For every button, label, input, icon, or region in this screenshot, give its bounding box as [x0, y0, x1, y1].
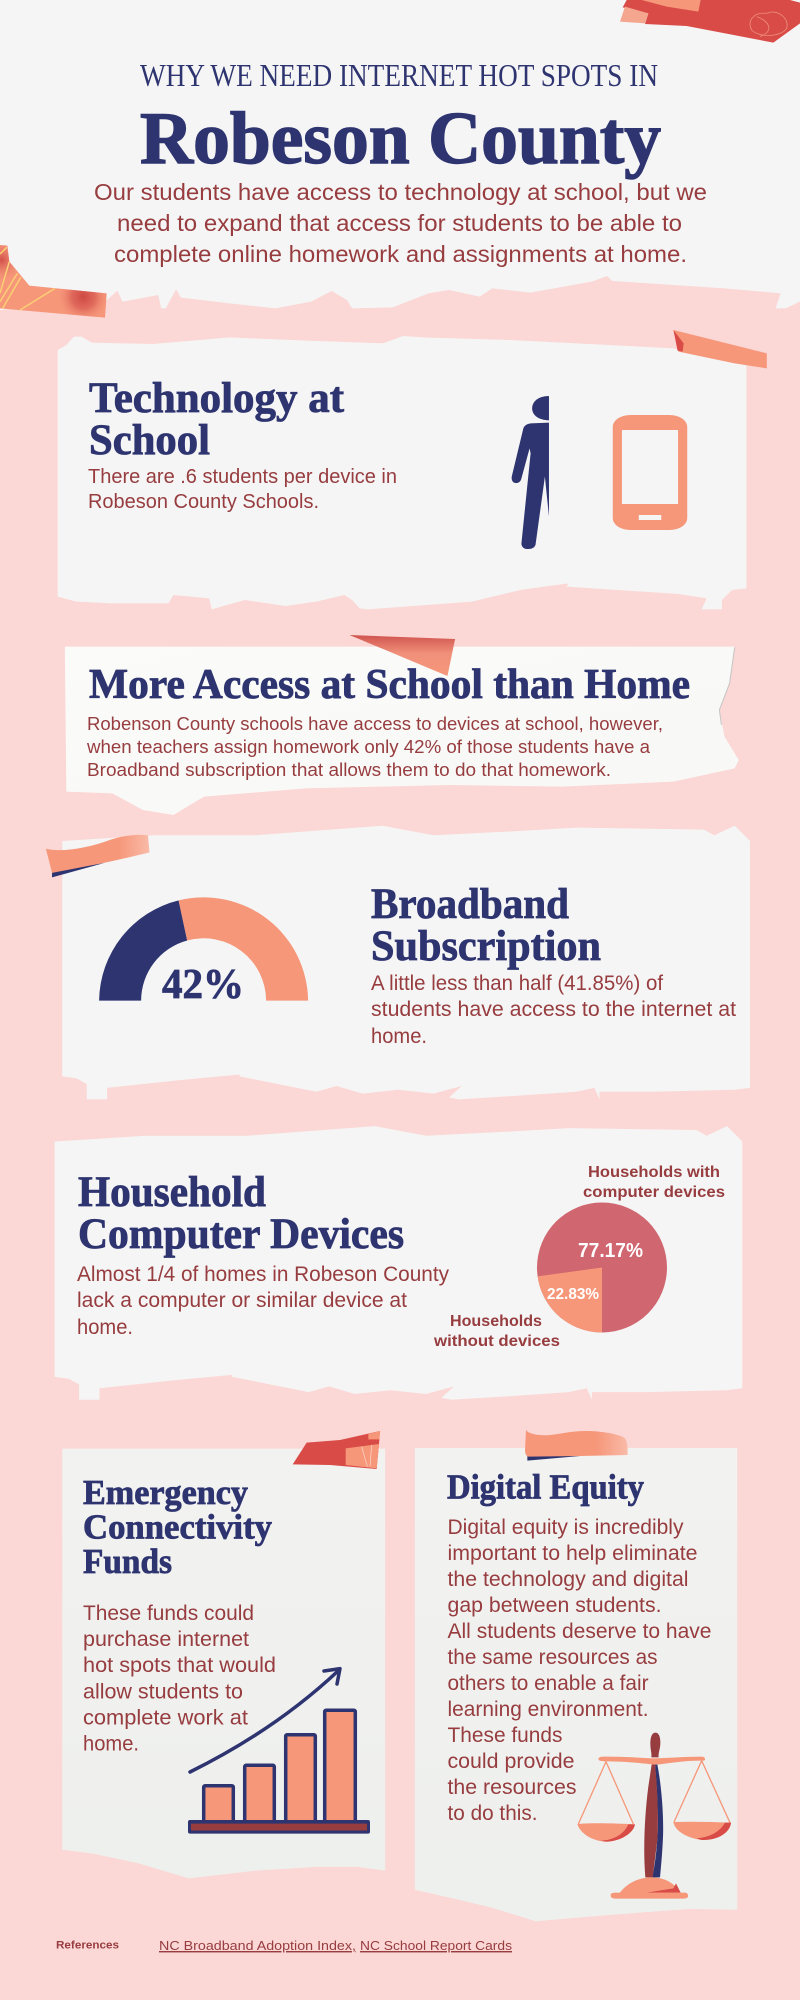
heading: Subscription [371, 923, 601, 970]
heading: Connectivity [83, 1508, 272, 1546]
body text: purchase internet [83, 1628, 249, 1651]
pie: without devices [538, 1268, 602, 1332]
intro text: complete online homework and assignments at home. [114, 241, 687, 267]
body text: complete work at [83, 1706, 248, 1730]
intro text: need to expand that access for students to be able to [117, 210, 682, 236]
label: households with devices: computer devices [583, 1184, 725, 1201]
pie chart [537, 1202, 667, 1332]
body text: Almost 1/4 of homes in Robeson County [77, 1263, 449, 1286]
body text: A little less than half (41.85%) of [371, 972, 663, 995]
reference links: NC School Report Cards [360, 1938, 513, 1953]
body text: home. [371, 1025, 427, 1048]
body text [83, 1602, 276, 1756]
label: households with devices: Households with [588, 1164, 720, 1181]
icon: balance scale [577, 1733, 731, 1899]
body text: All students deserve to have [448, 1620, 712, 1643]
panel: household computer devices [55, 1126, 742, 1400]
panel: digital equity [415, 1430, 737, 1921]
tape: red [293, 1431, 380, 1469]
heading: Funds [83, 1542, 172, 1581]
intro text: Our students have access to technology at school, but we [94, 179, 707, 205]
body text: home. [77, 1316, 133, 1339]
references label: References [56, 1940, 119, 1952]
heading: Technology at [89, 375, 345, 422]
heading [83, 1473, 272, 1581]
tape: top right [620, 0, 800, 43]
panel: broadband subscription [46, 826, 750, 1099]
tape: card corner [673, 330, 767, 368]
label: households with devices [583, 1164, 725, 1201]
body text: home. [83, 1732, 139, 1756]
reference links: NC Broadband Adoption Index, [159, 1938, 356, 1953]
body text: There are .6 students per device in [88, 465, 397, 488]
card paper [62, 826, 750, 1099]
body text [448, 1516, 712, 1825]
icon: half student [512, 396, 549, 549]
body text: the same resources as [448, 1646, 658, 1669]
gauge value: 42% [162, 962, 244, 1008]
label: households without devices: without devices [433, 1333, 560, 1350]
card paper [415, 1448, 737, 1921]
heading: School [89, 417, 210, 464]
card paper [55, 1126, 742, 1400]
body text: when teachers assign homework only 42% of those students have a [86, 736, 651, 757]
heading [89, 375, 345, 464]
tape: wavy [46, 835, 149, 877]
card paper [58, 336, 746, 609]
body text: Digital equity is incredibly [448, 1516, 684, 1539]
body text [77, 1263, 449, 1339]
body text: others to enable a fair [448, 1672, 648, 1695]
title: Robeson County [140, 98, 661, 180]
heading: Emergency [83, 1473, 248, 1512]
pie value: 22.83%: 22.83% [547, 1286, 599, 1303]
panel: more access at school than home [65, 635, 739, 815]
body text [88, 465, 397, 513]
body text: could provide [448, 1750, 574, 1773]
body text [86, 713, 663, 780]
body text: to do this. [448, 1802, 538, 1825]
body text: the technology and digital [448, 1568, 688, 1591]
heading: Digital Equity [447, 1468, 644, 1507]
heading: More Access at School than Home [89, 662, 690, 708]
pie: with devices [537, 1202, 667, 1332]
body text: hot spots that would [83, 1654, 276, 1677]
body text: allow students to [83, 1680, 243, 1704]
body text [371, 972, 736, 1048]
tape: wavy [525, 1430, 628, 1461]
body text: Broadband subscription that allows them to do that homework. [87, 759, 611, 780]
gauge: navy 42% segment [99, 900, 187, 1001]
heading [371, 881, 601, 970]
icon: phone [613, 415, 687, 530]
tape: triangle [349, 635, 455, 676]
panel: emergency connectivity funds [62, 1431, 385, 1878]
card paper [62, 1449, 385, 1878]
tape: left [0, 245, 107, 318]
body text: gap between students. [448, 1594, 662, 1617]
panel: technology at school [58, 330, 767, 609]
heading: Household [78, 1169, 266, 1216]
body text: Robeson County Schools. [88, 490, 319, 513]
panel: header [0, 0, 800, 318]
pie value: 77.17%: 77.17% [578, 1240, 643, 1262]
body text: These funds [448, 1724, 562, 1747]
label: households without devices: Households [450, 1313, 542, 1330]
heading: Broadband [371, 881, 569, 928]
body text: important to help eliminate [448, 1542, 698, 1565]
icon: rising bar chart [188, 1669, 370, 1834]
body text: Robenson County schools have access to devices at school, however, [87, 713, 663, 734]
subtitle: WHY WE NEED INTERNET HOT SPOTS IN [140, 57, 658, 93]
intro text [94, 179, 707, 267]
header torn paper [0, 0, 800, 310]
body text: the resources [448, 1776, 576, 1799]
gauge chart [99, 897, 308, 1008]
body text: learning environment. [448, 1698, 648, 1721]
gauge: orange remainder [179, 897, 308, 1001]
heading: Computer Devices [78, 1211, 404, 1258]
label: households without devices [433, 1313, 560, 1350]
reference links [159, 1938, 513, 1953]
body text: These funds could [83, 1602, 254, 1625]
body text: lack a computer or similar device at [77, 1289, 407, 1312]
card paper [65, 647, 739, 815]
heading [78, 1169, 404, 1258]
body text: students have access to the internet at [371, 998, 736, 1021]
